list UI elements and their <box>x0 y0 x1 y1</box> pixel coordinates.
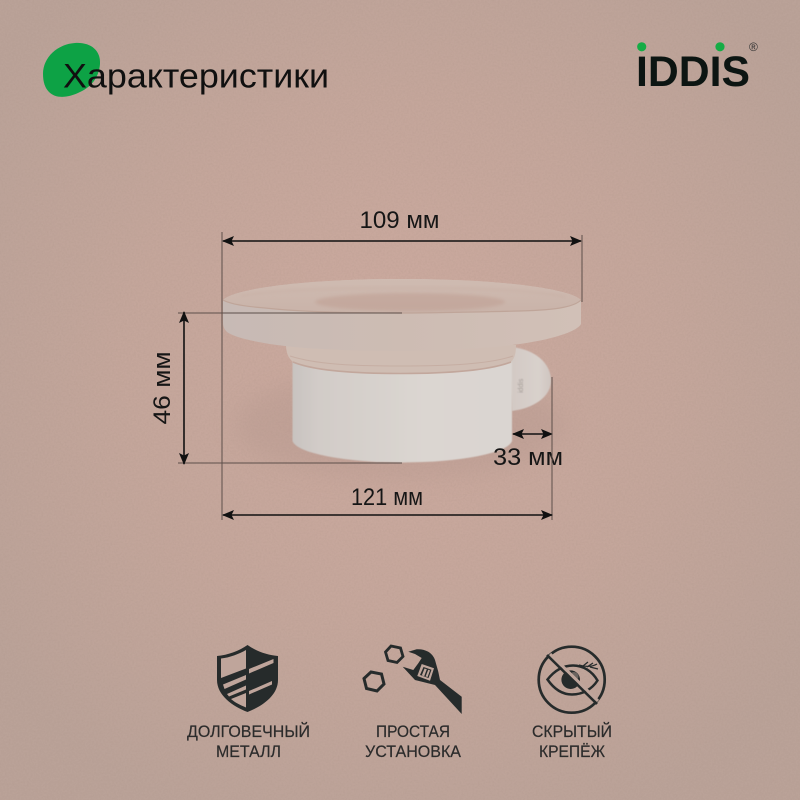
glass plate <box>223 279 581 351</box>
icon: shield <box>217 645 278 712</box>
logo: IDDIS: IDDIS <box>636 48 750 96</box>
dimension: 121 mm: 121 мм <box>351 484 423 511</box>
title text: Характеристики <box>63 58 329 96</box>
dimension: 46 mm: 46 мм <box>149 352 176 424</box>
logo: IDDIS: ® <box>749 40 758 54</box>
label: КРЕПЁЖ <box>539 743 606 761</box>
dimension: 109 mm <box>222 207 582 520</box>
wall mount <box>510 347 551 411</box>
label: УСТАНОВКА <box>365 743 461 761</box>
label: ДОЛГОВЕЧНЫЙ <box>187 722 310 741</box>
dimension: 46 mm <box>149 312 402 464</box>
wall shadow <box>235 370 565 480</box>
feature: durable metal <box>187 645 310 761</box>
dimension: 33 mm <box>493 434 563 471</box>
label: СКРЫТЫЙ <box>532 722 612 741</box>
dimension: 33 mm: 33 мм <box>493 444 563 471</box>
green blob <box>43 43 100 97</box>
label: ПРОСТАЯ <box>376 723 450 741</box>
icon: wrench and nuts <box>364 646 462 714</box>
title: Характеристики <box>43 43 329 97</box>
white cylinder body <box>292 362 512 462</box>
icon: crossed-out eye <box>539 647 605 713</box>
product: soap dish <box>223 279 581 480</box>
wall mount: iddis <box>518 378 525 393</box>
dimension: 109 mm: 109 мм <box>360 207 440 234</box>
feature: hidden fastening <box>532 647 612 761</box>
feature: easy installation <box>364 646 462 761</box>
label: МЕТАЛЛ <box>216 743 281 761</box>
glass neck <box>286 345 516 374</box>
